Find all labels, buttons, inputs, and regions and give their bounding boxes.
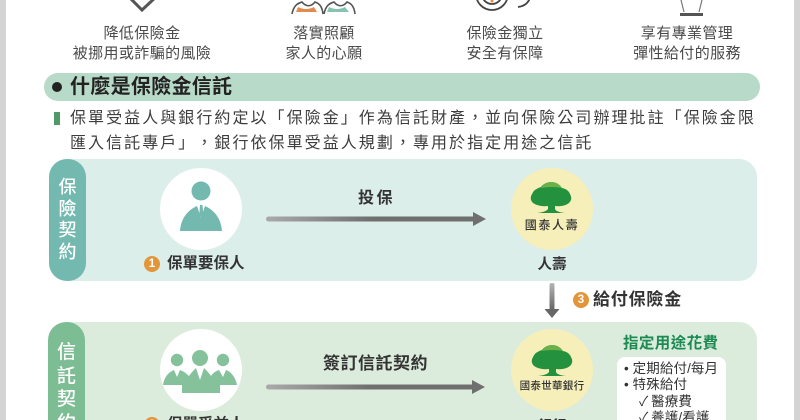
benefit caption 2: 家人的心願 [285,44,362,62]
number 2 badge [144,417,160,420]
benefit caption 3 [466,25,544,62]
description text [70,109,756,152]
heading: designated spending: 指定用途花費 [623,335,718,352]
panel label tab [48,322,85,420]
tab text: 託 [57,366,76,386]
label: apply: 投保 [358,190,395,207]
description text: 匯入信託專戶」，銀行依保單受益人規劃，專用於指定用途之信託 [70,135,593,152]
benefit caption 1 [73,25,211,62]
left page edge [0,0,6,420]
panel: insurance contract [49,159,757,281]
tab text: 契 [58,220,76,240]
section heading bar [44,73,760,101]
right page edge [794,0,800,420]
box: designated spending list [617,357,726,420]
benefit caption 3: 安全有保障 [466,44,544,62]
icon: safe dial [476,0,530,11]
icon: trophy stand [680,0,703,16]
number 3 badge [573,292,589,308]
label: sign trust contract: 簽訂信託契約 [323,354,428,373]
tab text [57,342,76,420]
benefit caption 4: 彈性給付的服務 [633,44,741,62]
label: pay insurance benefit: 給付保險金 [593,290,682,309]
logo text: 國泰世華銀行 [520,380,584,392]
circle: Cathay Life logo [511,168,593,250]
tab text: 保 [58,177,76,197]
icon: person [180,182,222,231]
circle: settlor [160,329,242,411]
logo text: 國泰人壽 [525,218,579,232]
arrow: pay claim [544,283,560,318]
description text: 保單受益人與銀行約定以「保險金」作為信託財產，並向保險公司辦理批註「保險金限 [70,110,756,127]
benefit caption 4: 享有專業管理 [641,25,733,42]
benefit caption 3: 保險金獨立 [466,25,544,42]
tab text: 契 [57,389,76,410]
arrow: sign trust [266,380,485,394]
tab text [58,177,76,262]
green marker [54,112,60,125]
list item: periodic: • 定期給付/每月 [624,361,718,376]
panel: trust contract [48,322,757,420]
benefit caption 2 [285,25,362,62]
list item: medical: ✓ 醫療費 [639,394,692,409]
benefit caption 4 [633,25,741,62]
icon: tree [530,182,572,213]
number 3 badge: 3 [578,294,584,306]
circle: policyholder [160,168,242,250]
arrow: apply [266,212,486,226]
number 1 badge [144,256,160,272]
tab text: 險 [58,198,76,218]
tab text: 信 [57,342,76,363]
icon: group [163,350,237,393]
icon: tree [532,345,572,376]
benefit caption 1: 被挪用或詐騙的風險 [73,44,211,62]
list item: special: • 特殊給付 [624,377,687,392]
life insurer label: 人壽 [538,257,566,273]
icon: family [291,1,356,14]
benefit caption 1: 降低保險金 [103,25,180,42]
heading bullet [52,82,62,92]
tab text: 約 [58,242,76,262]
number 1 badge: 1 [149,258,155,270]
policyholder label: 保單要保人 [167,255,245,272]
icon: shield [130,0,155,12]
heading text: 什麼是保險金信託 [70,76,232,98]
panel label tab [49,159,86,281]
circle: Cathay United Bank logo [511,329,593,411]
benefit caption 2: 落實照顧 [293,25,355,42]
